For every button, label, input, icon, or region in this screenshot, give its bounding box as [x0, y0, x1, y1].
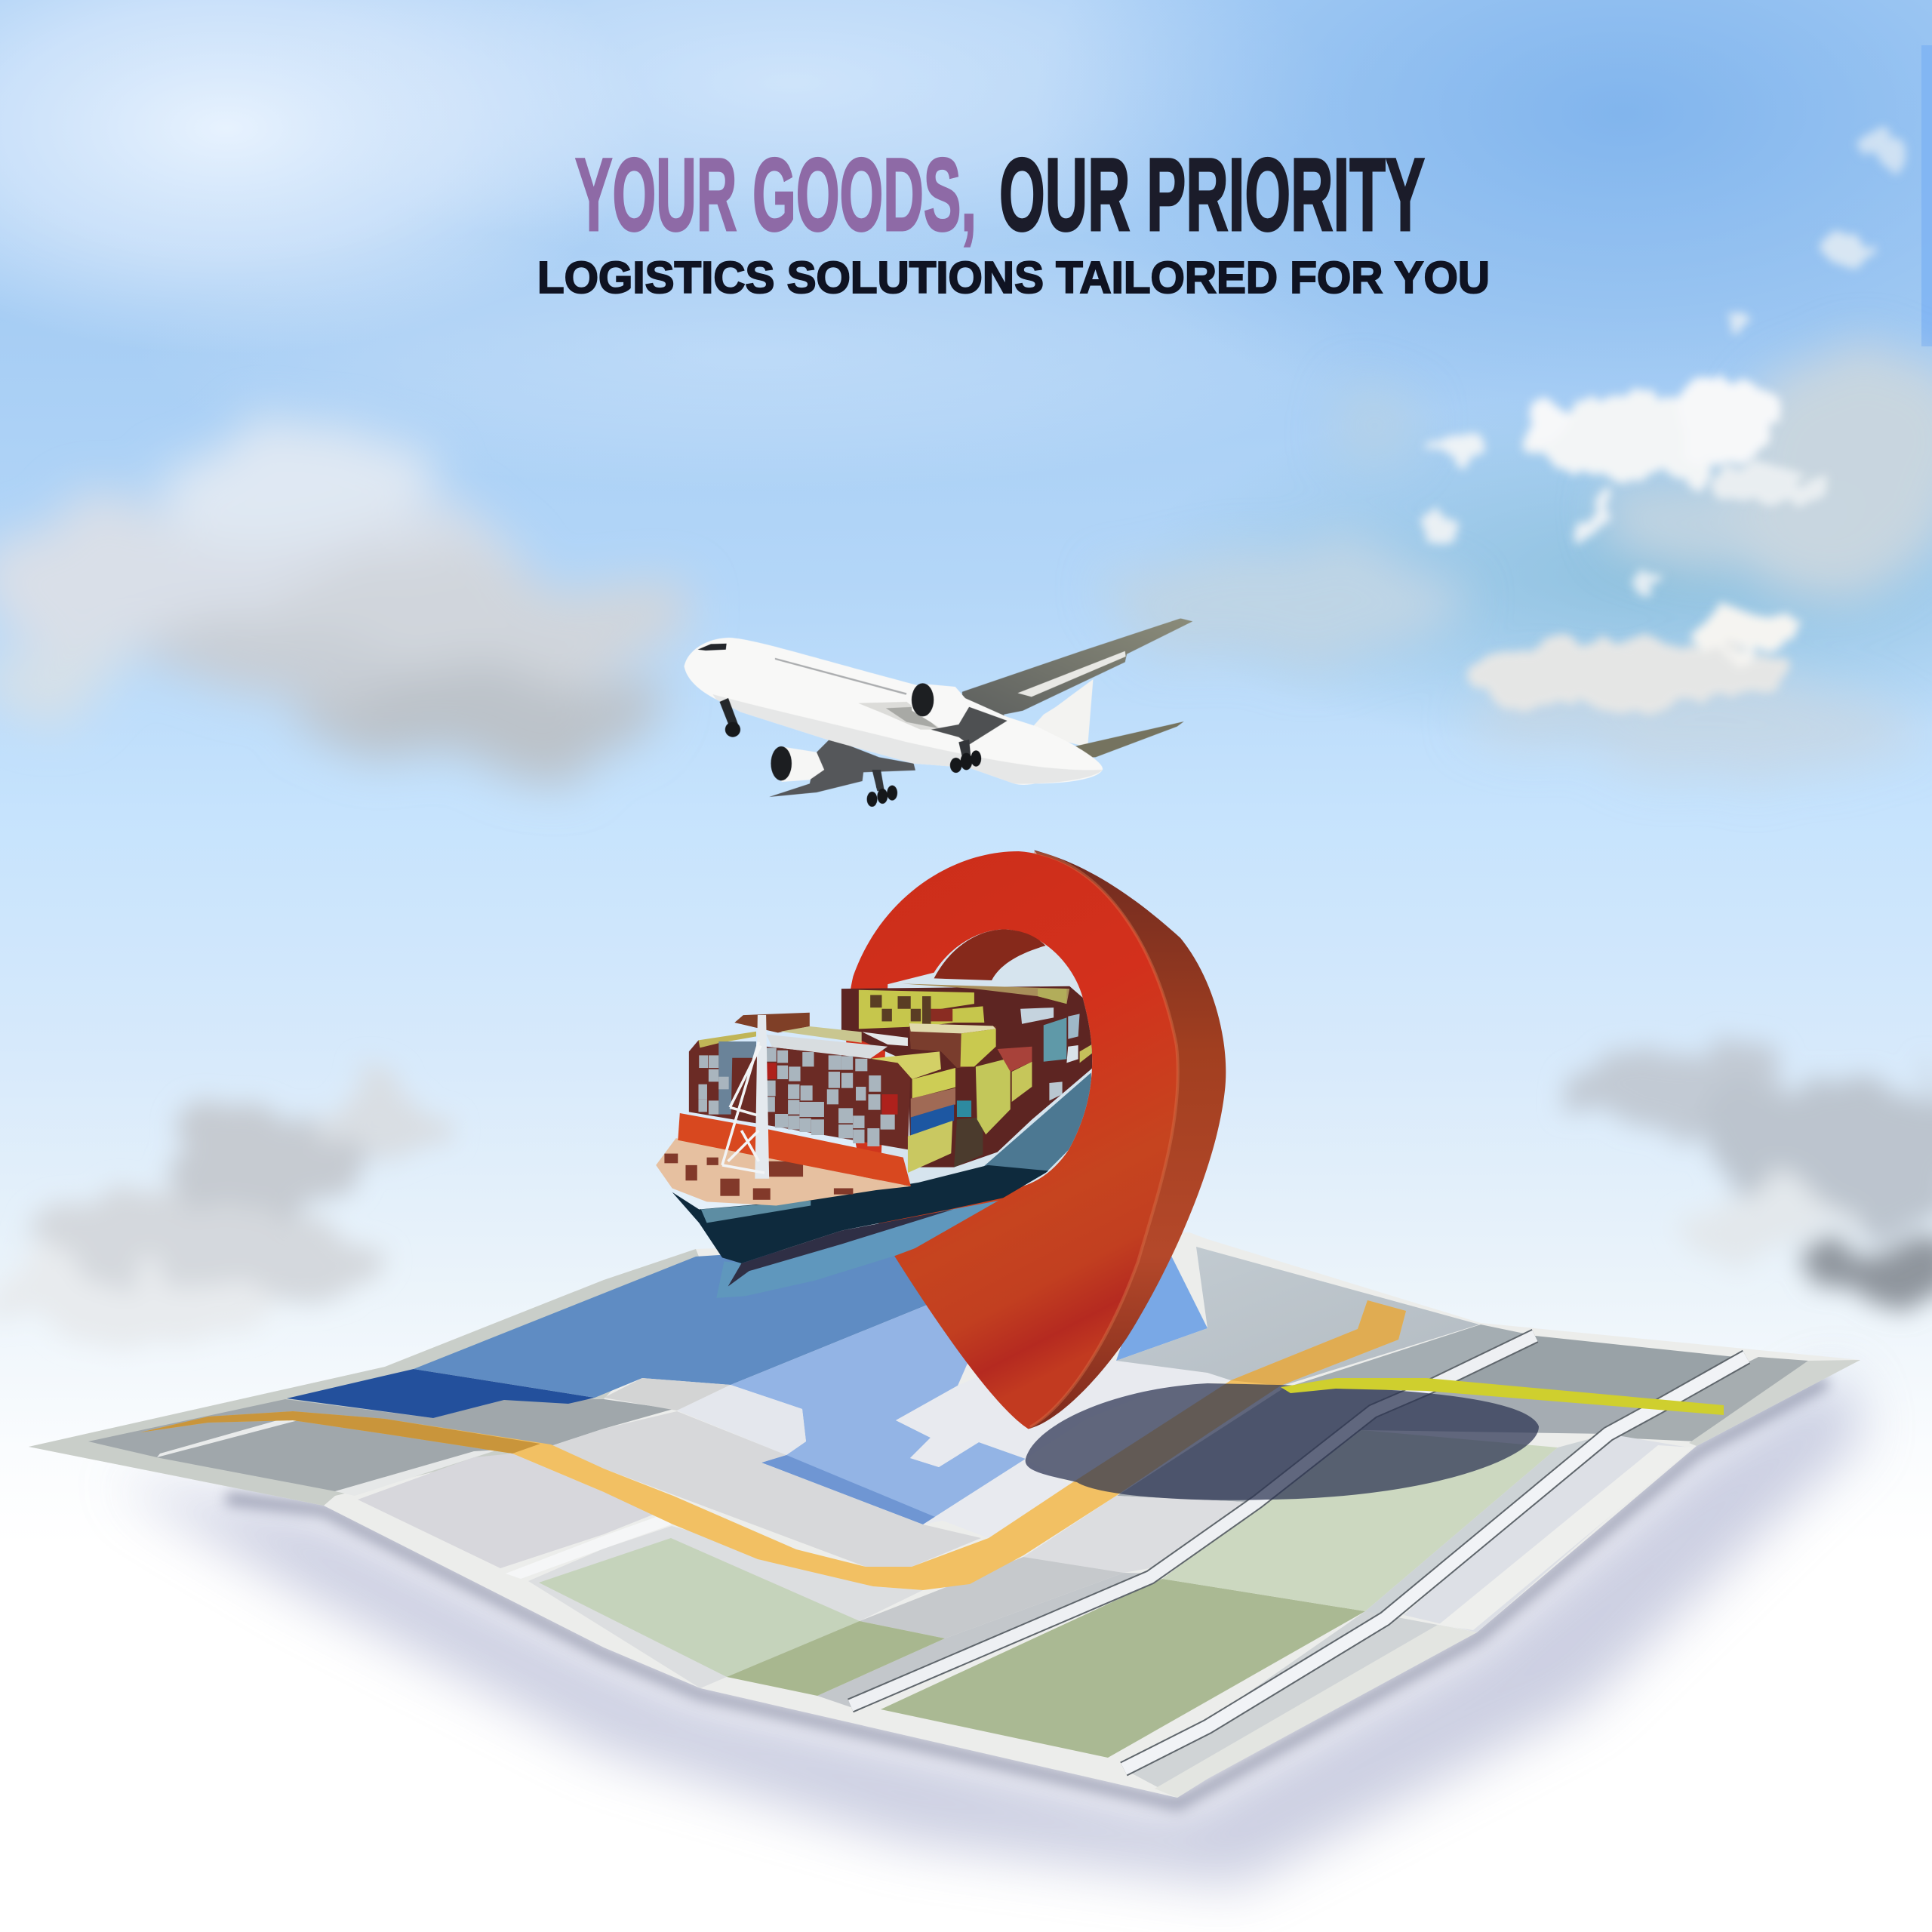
route road — [140, 1300, 1406, 1590]
pin side — [1009, 851, 1226, 1429]
map paper — [29, 1232, 1860, 1798]
near engine — [911, 684, 968, 727]
inner arch — [934, 930, 1046, 980]
clouds upper left — [0, 430, 687, 770]
nose gear — [719, 698, 739, 728]
crane backdrop — [718, 1041, 756, 1115]
pale right of pin — [896, 1358, 1231, 1538]
pin shadow — [1026, 1383, 1539, 1500]
cockpit — [698, 644, 727, 651]
rear maroon mass — [841, 986, 1094, 1168]
deck cargo — [664, 1154, 853, 1200]
pin rim — [1030, 853, 1178, 1427]
road strip one — [851, 1336, 1535, 1706]
far engine — [771, 746, 824, 782]
clouds upper right — [1102, 136, 1932, 770]
main gear right — [950, 740, 981, 773]
light green — [539, 1538, 860, 1677]
right strip cells — [1365, 1434, 1608, 1619]
haze — [1102, 347, 1932, 770]
left leaf margin — [29, 1249, 709, 1506]
left white strip — [157, 1417, 298, 1457]
wake strip — [728, 1210, 953, 1287]
grey cells — [698, 1048, 895, 1146]
right blue water — [1116, 1253, 1208, 1361]
airplane — [685, 618, 1192, 807]
darker road right — [1231, 1300, 1406, 1386]
crane — [722, 1015, 769, 1179]
folded map — [29, 1232, 1860, 1798]
olive box — [954, 1117, 983, 1168]
left strip — [506, 1515, 672, 1579]
map shadow — [113, 1374, 1864, 1887]
clouds lower left — [0, 1094, 445, 1343]
blue water — [414, 1238, 981, 1398]
left grey cell — [88, 1399, 673, 1491]
middle block — [909, 1026, 996, 1068]
title — [537, 137, 1490, 303]
big dark green — [881, 1579, 1365, 1758]
clouds lower right — [1555, 1053, 1932, 1317]
gear bay — [931, 707, 1008, 745]
pin opening — [880, 930, 1092, 1188]
small dark green — [727, 1621, 945, 1696]
tail fin — [1028, 679, 1093, 747]
deck — [656, 1138, 911, 1205]
water — [977, 1072, 1093, 1196]
brown top box — [734, 1013, 810, 1032]
rear checker — [870, 995, 952, 1024]
stabilizer — [1072, 721, 1184, 758]
darker road left — [140, 1411, 540, 1454]
red cells — [766, 1063, 898, 1115]
lower cells — [358, 1454, 657, 1568]
far wing lower — [769, 738, 915, 797]
main gear left — [867, 770, 897, 807]
tall yellow — [976, 1058, 1011, 1134]
white puffs — [1419, 136, 1904, 709]
container tops — [698, 1032, 756, 1048]
right grey cells — [1283, 1324, 1535, 1389]
pin face — [846, 851, 1178, 1429]
location pin — [846, 851, 1226, 1429]
light blue water — [731, 1283, 1026, 1524]
headline: YOUR GOODS, — [575, 137, 977, 253]
pale top cell — [604, 1378, 731, 1411]
right pale boxes — [1020, 1008, 1054, 1024]
subheading: LOGISTICS SOLUTIONS TAILORED FOR YOU — [537, 253, 1490, 303]
rear yellow block — [859, 990, 984, 1029]
bulwark — [678, 1113, 911, 1186]
rear tan strip — [902, 983, 1069, 1004]
fuselage — [685, 638, 1103, 785]
upper grey leaf — [1116, 1247, 1479, 1386]
wake — [716, 1200, 1003, 1298]
hull stripe — [701, 1201, 811, 1223]
hull — [672, 1165, 1050, 1263]
cargo ship — [656, 983, 1094, 1298]
far wing — [934, 618, 1192, 745]
centre cell — [551, 1411, 981, 1567]
yellow route — [1281, 1378, 1724, 1415]
pale block — [677, 1385, 806, 1455]
headline: OUR PRIORITY — [999, 137, 1425, 253]
containers — [689, 983, 1094, 1173]
light green right — [1162, 1430, 1558, 1611]
dark blue water — [287, 1369, 595, 1418]
teal box — [957, 1100, 971, 1117]
near wing root — [858, 702, 941, 730]
window line — [775, 658, 906, 695]
front maroon face — [689, 1040, 911, 1149]
yellow stack — [870, 1051, 941, 1079]
red top — [998, 1047, 1032, 1072]
road strip two — [1124, 1357, 1746, 1769]
